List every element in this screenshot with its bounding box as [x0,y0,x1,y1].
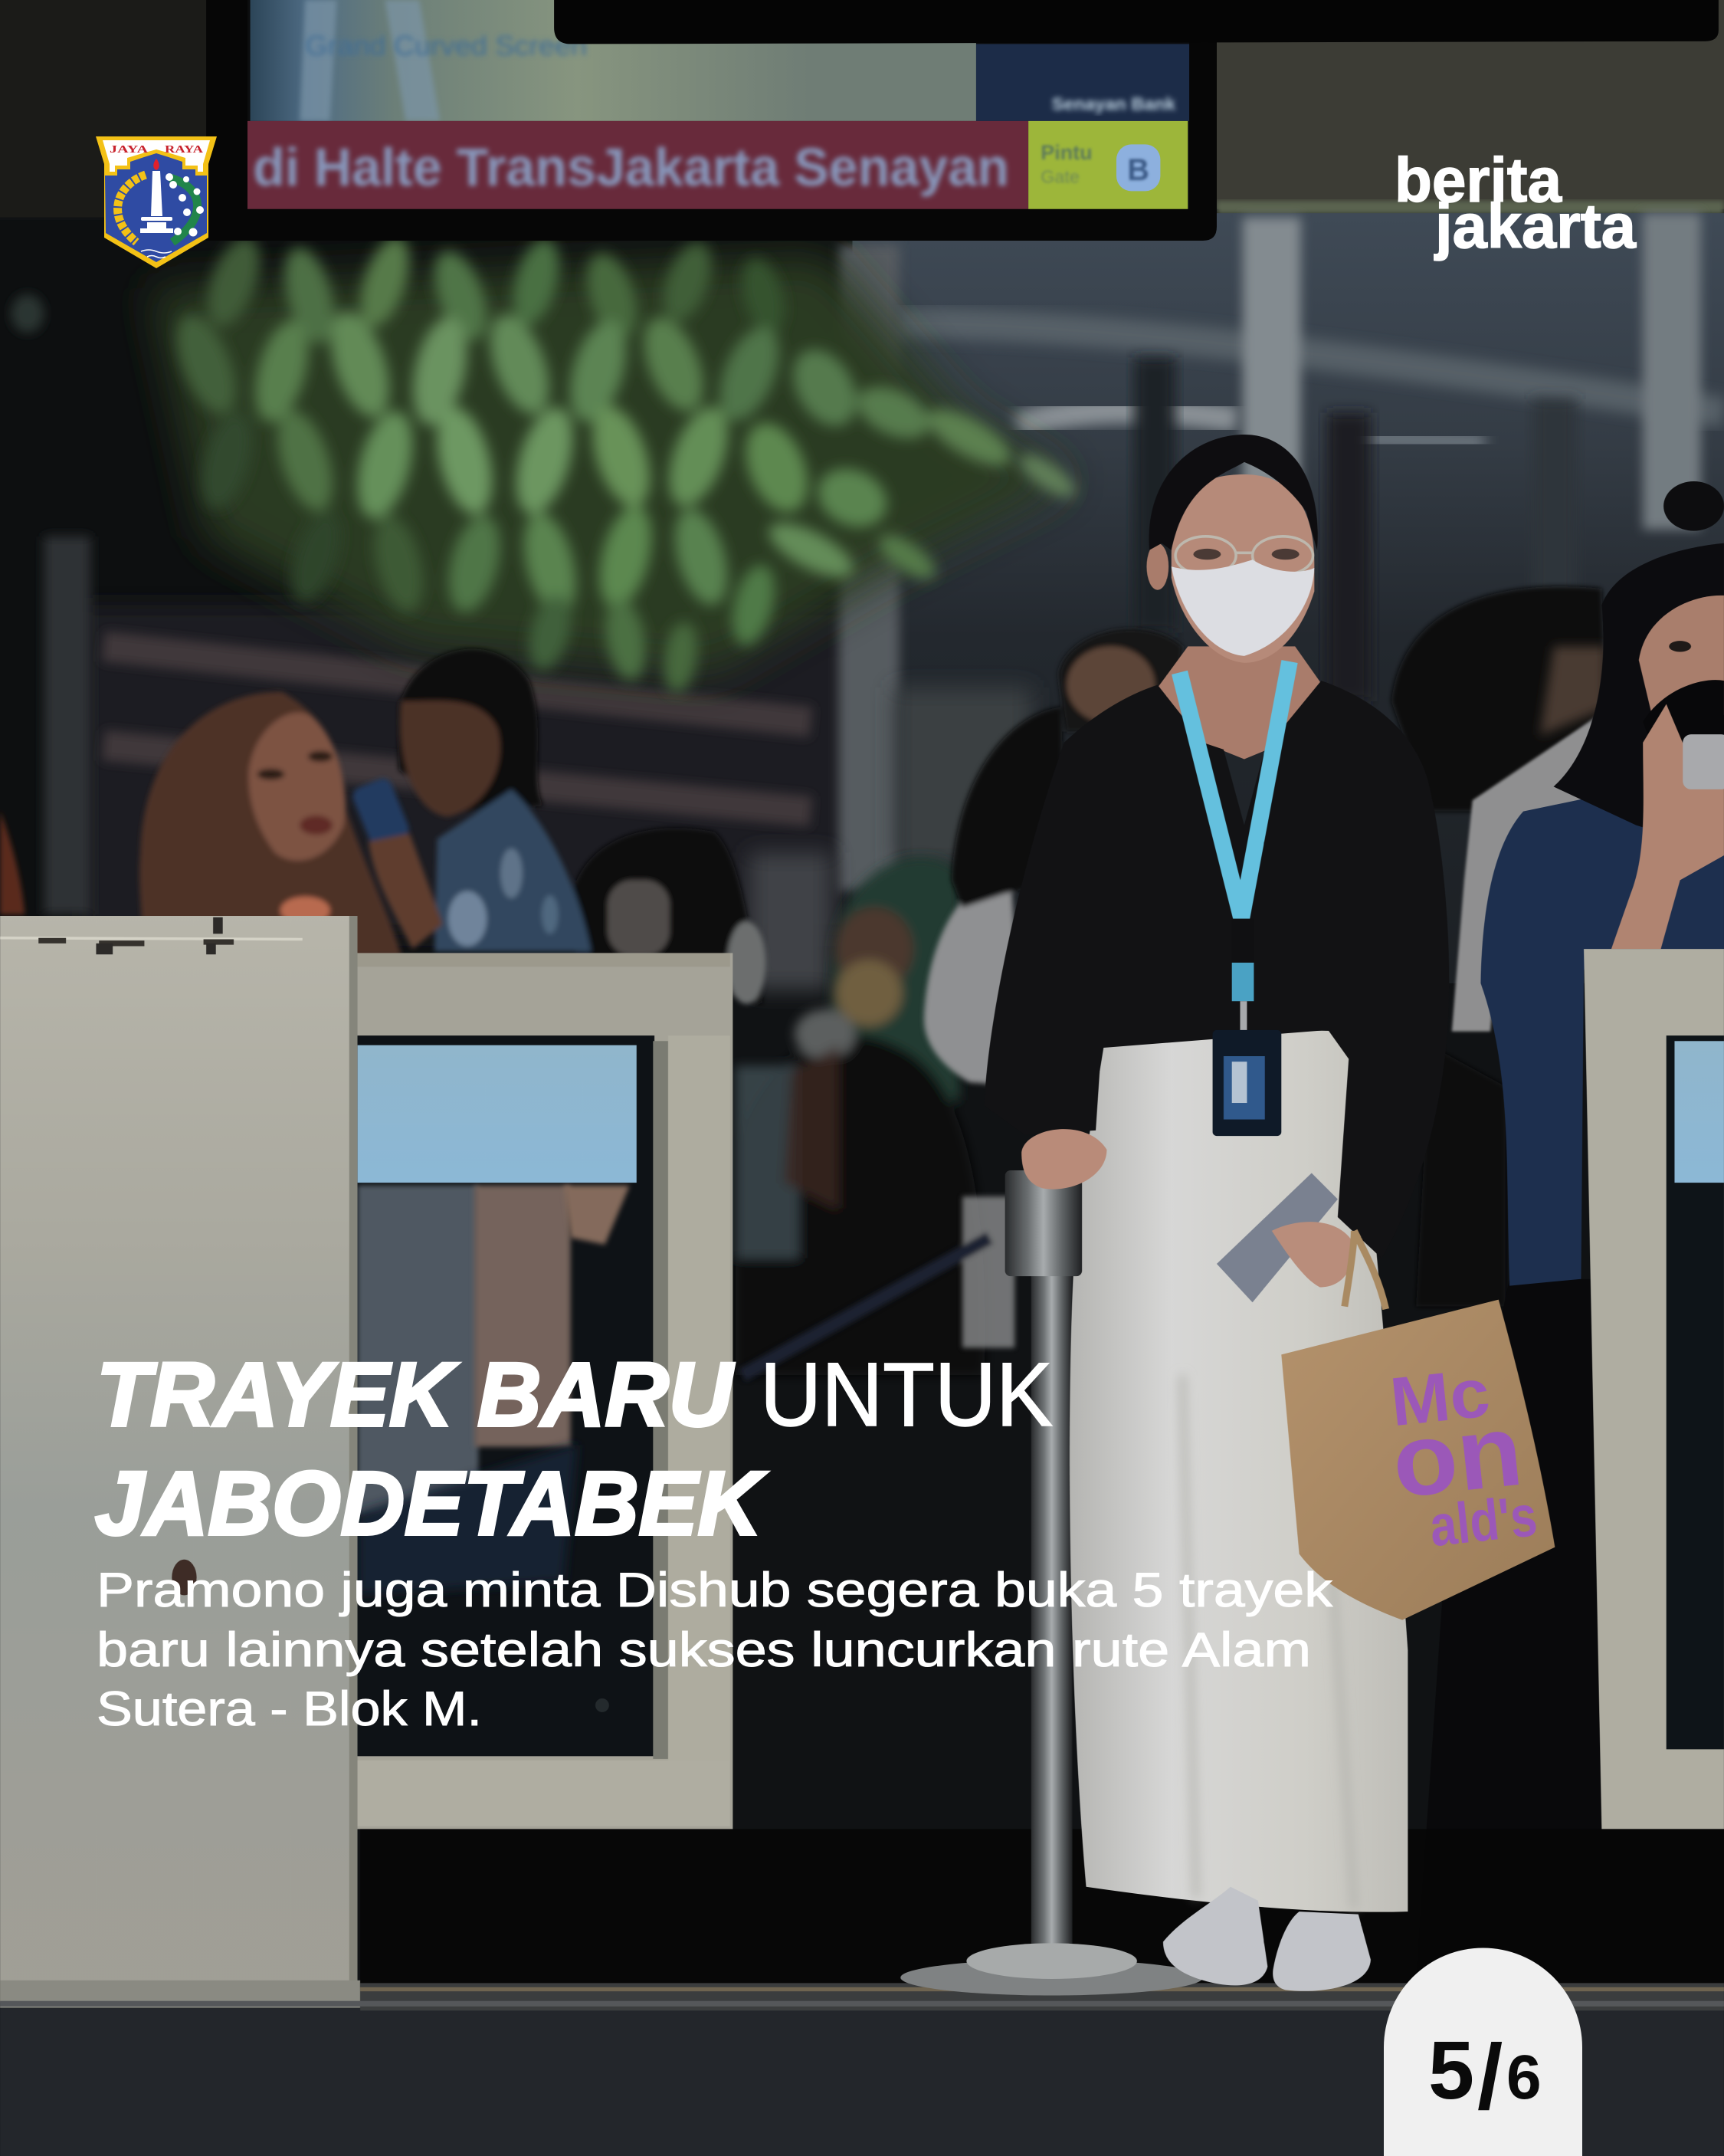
phone in hand [1217,1173,1354,1302]
hand on stanchion [1021,1129,1106,1190]
rice stalk [118,175,146,242]
title: TRAYEK BARU [97,1344,735,1446]
jasmine branch [166,173,204,242]
title: JABODETABEK [95,1453,768,1554]
page counter badge: 5 [1428,2023,1474,2116]
her sneakers [1163,1887,1371,1991]
her hair and head [1146,435,1318,663]
her neck and chest [1158,646,1321,759]
ID badge [1213,1030,1281,1136]
paper shopping bag: on [1387,1393,1527,1520]
subtitle text block [97,1564,1333,1736]
bystanders on the left: mother in hijab and child [0,649,765,1004]
motto: JAYA [110,144,149,156]
logo: berita jakarta: jakarta [1434,192,1637,261]
right gate: window frame [1584,949,1724,1829]
maroon stop banner [247,121,1028,209]
phone [1683,734,1724,789]
overhead information display [206,0,1217,241]
her face [1639,596,1724,718]
background: blurred green tree [151,231,1082,695]
stanchion base and pole [900,1272,1203,1996]
title [95,1344,1053,1554]
her sweater [985,681,1449,1258]
mother's face [249,713,345,861]
navy jacket [1480,791,1724,1286]
gate indicator: B [1127,153,1149,187]
her white trousers [1070,1031,1408,1912]
paper shopping bag: ald's [1427,1483,1540,1558]
logo: berita jakarta: berita [1395,146,1562,215]
phone [350,776,411,850]
motto: RAYA [165,144,204,156]
overhead information display: Senayan Bank [1052,94,1175,114]
paper shopping bag [1281,1231,1555,1620]
lanyard [1180,661,1290,919]
her face mask [1172,560,1314,656]
title: UNTUK [760,1344,1053,1446]
waves [141,250,172,258]
floor and platform [0,1829,1724,2156]
maroon stop banner: di Halte TransJakarta Senayan [253,137,1009,197]
raised hand and forearm [1611,704,1724,949]
logo: Jakarta coat of arms [96,136,217,268]
gate indicator [1028,121,1188,209]
page counter badge: 6 [1506,2043,1542,2112]
page counter badge: / [1477,2026,1503,2128]
bystanders on the right [1391,481,1724,1980]
paper shopping bag: Mc [1387,1354,1493,1441]
gate indicator: Gate [1041,167,1080,187]
headphone guy [569,828,765,1004]
page counter badge [1384,1948,1582,2156]
black mask [1643,680,1724,767]
gate indicator: Pintu [1041,141,1093,164]
top black display edge [554,0,1719,44]
bystanders in the middle queue [736,857,985,1375]
monument [140,159,173,233]
motto [110,144,204,156]
subtitle text block: Pramono juga minta Dishub segera buka 5 trayek [97,1564,1333,1617]
left gate: concrete panel and window frame [0,916,733,2008]
subtitle text block: Sutera - Blok M. [97,1682,482,1736]
person behind the woman with white sleeve [742,629,1182,1375]
grey jacket [1452,712,1603,1032]
background: blurred station structure [0,0,1724,990]
child's hair and face [398,649,543,817]
her glasses [1175,537,1313,575]
blurred screen caption: Grand Curved Screen [305,31,587,61]
stanchion head [1005,1170,1082,1276]
woman in mask and lanyard [985,435,1555,1991]
hijab and bun [1554,543,1724,852]
child's denim shirt [434,789,592,952]
hijab [139,692,402,956]
mother's hand [369,833,443,949]
person with black hat [1391,586,1606,812]
subtitle text block: baru lainnya setelah sukses luncurkan rute Alam [97,1623,1311,1677]
logo: berita jakarta [1395,146,1637,261]
